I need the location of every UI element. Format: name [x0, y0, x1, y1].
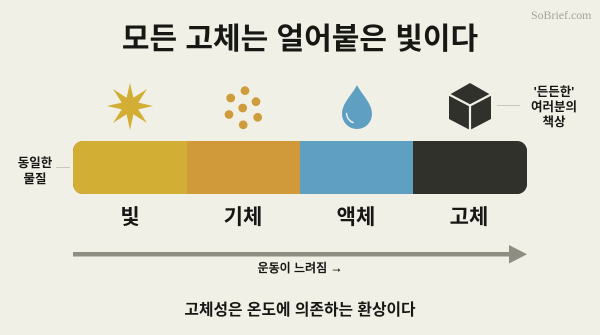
label: solid: 고체 [450, 206, 488, 229]
icon: particles (gas) [224, 86, 262, 130]
watermark: SoBrief.com [531, 8, 591, 22]
icon: cube (solid) [449, 83, 491, 130]
callout: your solid desk [531, 85, 577, 129]
conclusion: 고체성은 온도에 의존하는 환상이다 [184, 302, 416, 319]
callout: your solid desk: 책상 [542, 115, 566, 129]
icon: star (light) [107, 83, 153, 130]
label: light: 빛 [120, 206, 140, 229]
segment: liquid [300, 141, 413, 194]
connector: same substance label [56, 167, 70, 168]
icon: water drop (liquid) [342, 85, 372, 129]
segment: light [73, 141, 187, 194]
callout: same substance [18, 156, 52, 186]
title: 모든 고체는 얼어붙은 빛이다 [122, 23, 478, 56]
callout: same substance: 물질 [23, 172, 46, 186]
state bar [73, 141, 527, 194]
segment: solid [413, 141, 527, 194]
label: liquid: 액체 [337, 206, 375, 229]
segment: gas [187, 141, 300, 194]
label: gas: 기체 [224, 206, 262, 229]
arrow: motion slows [73, 245, 527, 264]
callout: your solid desk: '든든한' [534, 85, 574, 99]
arrow caption: 운동이 느려짐 → [258, 261, 342, 275]
callout: same substance: 동일한 [18, 156, 52, 170]
callout: your solid desk: 여러분의 [531, 100, 577, 114]
connector: solid label [497, 105, 520, 106]
